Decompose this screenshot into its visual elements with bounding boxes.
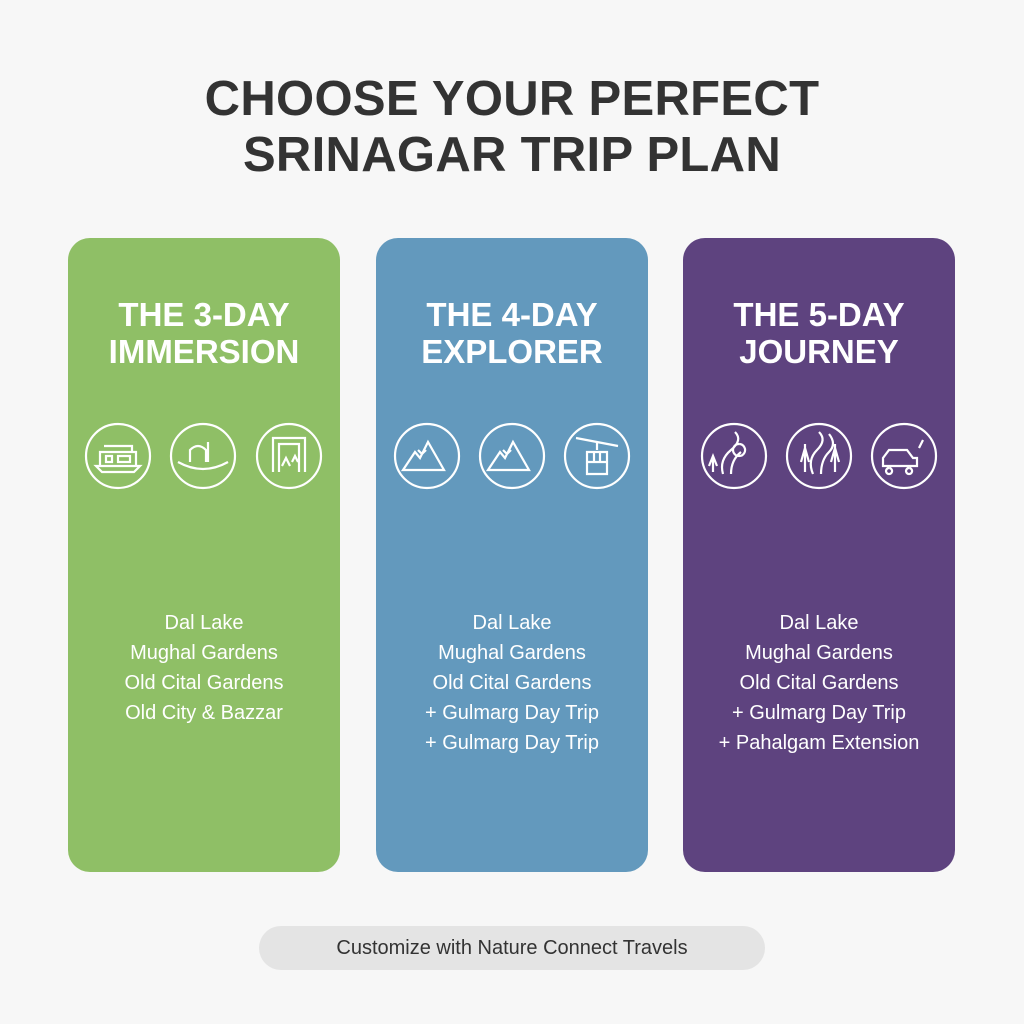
title: SRINAGAR TRIP PLAN (243, 128, 781, 182)
heading: 5-day: THE 5-DAY (733, 296, 905, 333)
panel: 4-day (376, 238, 648, 872)
list: + Gulmarg Day Trip (425, 702, 599, 724)
list (125, 612, 283, 724)
footer pill (259, 926, 765, 970)
list: Dal Lake (780, 612, 858, 634)
panel: 5-day (683, 238, 955, 872)
list: Mughal Gardens (438, 642, 586, 664)
list (425, 612, 599, 754)
heading: 3-day (109, 296, 299, 370)
list: Old Cital Gardens (125, 672, 283, 694)
list: Old Cital Gardens (433, 672, 591, 694)
list: + Gulmarg Day Trip (732, 702, 906, 724)
list: + Pahalgam Extension (719, 732, 919, 754)
heading: 4-day: EXPLORER (421, 333, 603, 370)
list: Dal Lake (473, 612, 551, 634)
heading: 5-day (733, 296, 905, 370)
list: Dal Lake (165, 612, 243, 634)
list: Mughal Gardens (130, 642, 278, 664)
heading: 4-day: THE 4-DAY (426, 296, 598, 333)
icons: mountains, gondola (394, 422, 630, 490)
list: Old Cital Gardens (740, 672, 898, 694)
icons: houseboat, shikara, garden gate (84, 422, 322, 490)
footer pill: Customize with Nature Connect Travels (336, 937, 688, 959)
list: Mughal Gardens (745, 642, 893, 664)
title: CHOOSE YOUR PERFECT (205, 72, 819, 126)
icons: roads, car (700, 422, 938, 490)
title (205, 72, 819, 182)
list: Old City & Bazzar (125, 702, 283, 724)
heading: 5-day: JOURNEY (739, 333, 899, 370)
list: + Gulmarg Day Trip (425, 732, 599, 754)
heading: 4-day (421, 296, 603, 370)
heading: 3-day: IMMERSION (109, 333, 299, 370)
heading: 3-day: THE 3-DAY (118, 296, 290, 333)
list (719, 612, 919, 754)
panel: 3-day (68, 238, 340, 872)
